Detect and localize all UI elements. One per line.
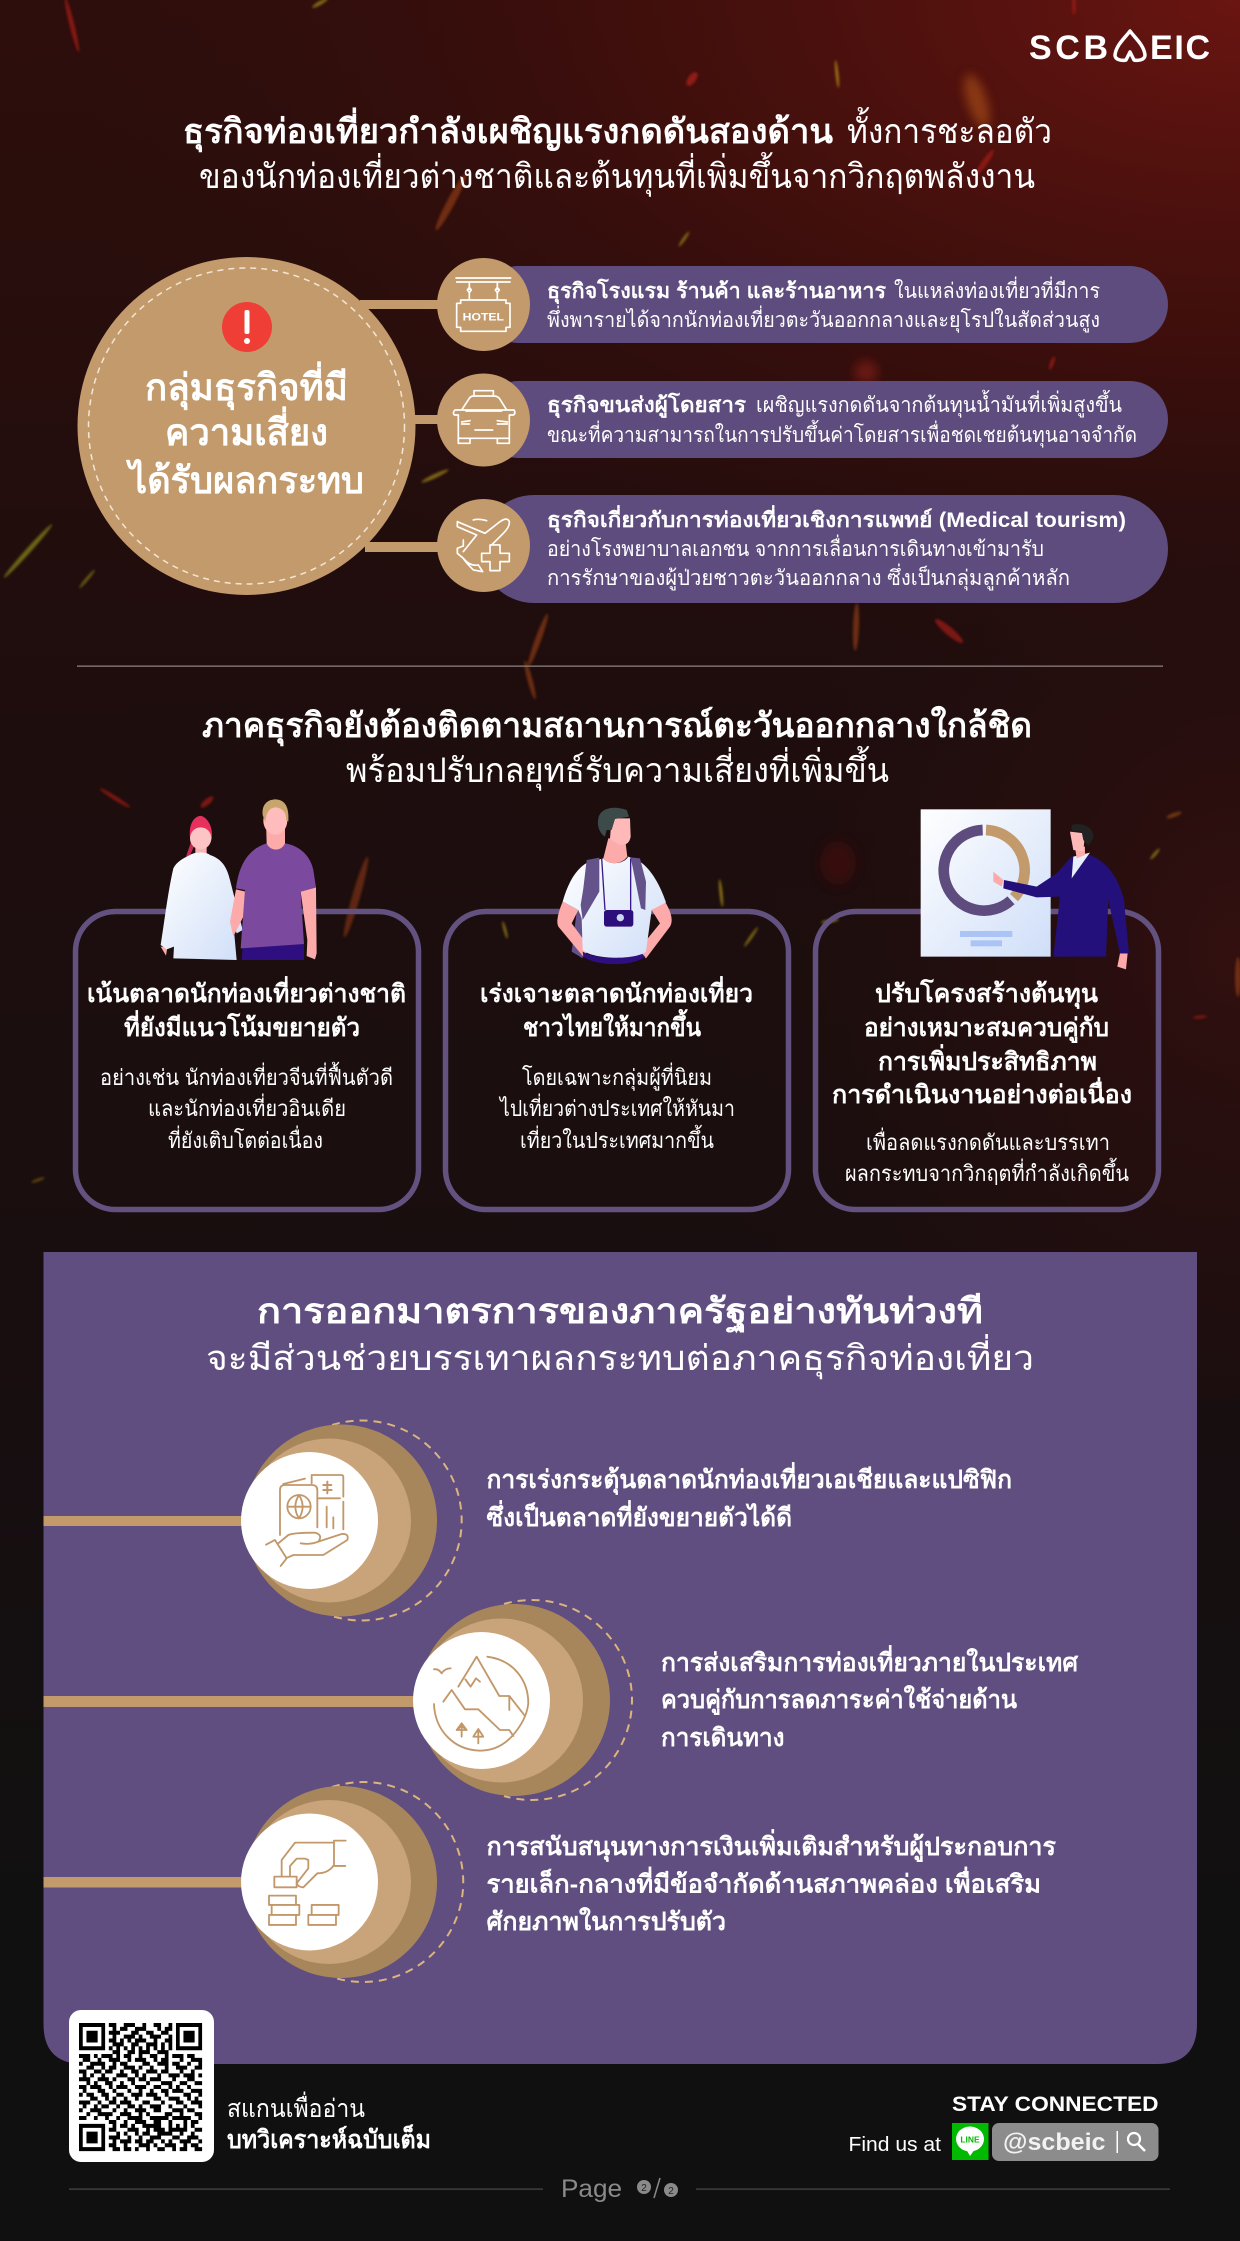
measure 1: Asia-Pacific: การเร่งกระตุ้นตลาดนักท่องเที่ยวเอเชียและแปซิฟิก [486,1462,1012,1496]
panel: passenger transport pill: เผชิญแรงกดดันจากต้นทุนน้ำมันที่เพิ่มสูงขึ้น [756,390,1122,418]
heading: monitor the Middle East: พร้อมปรับกลยุทธ์รับความเสี่ยงที่เพิ่มขึ้น [346,746,889,791]
scan-to-read caption: บทวิเคราะห์ฉบับเต็ม [227,2124,431,2154]
measure 1: Asia-Pacific: ซึ่งเป็นตลาดที่ยังขยายตัวได้ดี [486,1500,792,1532]
panel: medical tourism pill [480,495,1168,603]
panel: passenger transport pill: ขณะที่ความสามารถในการปรับขึ้นค่าโดยสารเพื่อชดเชยต้นทุนอาจจำกัด [547,420,1137,448]
panel: foreign tourists card: อย่างเช่น นักท่องเที่ยวจีนที่ฟื้นตัวดี [100,1062,393,1090]
panel: medical tourism pill: การรักษาของผู้ป่วยชาวตะวันออกกลาง ซึ่งเป็นกลุ่มลูกค้าหลัก [547,563,1070,591]
panel: cost structure card [816,912,1158,1210]
panel: Thai tourists card: เร่งเจาะตลาดนักท่องเที่ยว [480,976,753,1008]
panel: cost structure card: เพื่อลดแรงกดดันและบรรเทา [866,1127,1110,1155]
heading: tourism business pressures: ธุรกิจท่องเที่ยวกำลังเผชิญแรงกดดันสองด้าน [183,107,833,153]
icon: hotel sign [437,258,530,351]
circle title: ความเสี่ยง [165,406,328,453]
panel: medical tourism pill: ธุรกิจเกี่ยวกับการท่องเที่ยวเชิงการแพทย์ (Medical tourism) [547,504,1126,534]
panel: hotel pill: ธุรกิจโรงแรม ร้านค้า และร้านอาหาร [547,278,887,305]
panel: Thai tourists card [446,912,788,1210]
page number: Page [561,2175,622,2203]
heading: tourism business pressures: ทั้งการชะลอตัว [847,107,1052,151]
panel: cost structure card: ปรับโครงสร้างต้นทุน [875,978,1098,1010]
icon: mountains [434,1657,528,1751]
measure 2: domestic tourism: การเดินทาง [661,1724,784,1752]
panel: Thai tourists card: ชาวไทยให้มากขึ้น [523,1008,701,1042]
scan-to-read caption: สแกนเพื่ออ่าน [227,2091,365,2123]
heading: tourism business pressures [183,107,1052,197]
measure 3: SME financial support: ศักยภาพในการปรับตัว [486,1906,726,1936]
icon: taxi [437,374,530,466]
page number: 2 [641,2183,647,2194]
panel heading: การออกมาตรการของภาครัฐอย่างทันท่วงที [257,1292,983,1334]
panel: medical tourism pill: อย่างโรงพยาบาลเอกชน จากการเลื่อนการเดินทางเข้ามารับ [547,534,1044,561]
section divider [77,666,1163,667]
logo: SCB EIC [1029,29,1210,67]
line handle search box [992,2123,1158,2161]
panel: foreign tourists card: เน้นตลาดนักท่องเที่ยวต่างชาติ [87,976,406,1008]
icon: red warning [222,302,272,352]
panel: at-risk business groups circle [78,257,416,595]
panel heading: จะมีส่วนช่วยบรรเทาผลกระทบต่อภาคธุรกิจท่องเที่ยว [206,1334,1034,1379]
panel: Thai tourists card: ไปเที่ยวต่างประเทศให้หันมา [498,1093,735,1121]
background sparks [2,0,1240,1184]
illustration: backpacker with camera [557,808,672,964]
panel: foreign tourists card: ที่ยังมีแนวโน้มขยายตัว [124,1010,360,1042]
panel: foreign tourists card [76,912,418,1210]
stay connected: STAY CONNECTED [952,2093,1158,2116]
icon: LINE: LINE [960,2134,980,2144]
circle title: ได้รับผลกระทบ [125,458,364,501]
panel: hotel pill: พึ่งพารายได้จากนักท่องเที่ยวตะวันออกกลางและยุโรปในสัดส่วนสูง [547,305,1100,333]
panel: foreign tourists card: ที่ยังเติบโตต่อเนื่อง [168,1125,323,1153]
stay connected: Find us at [848,2134,941,2156]
icon: passport and ticket on hand [266,1475,348,1566]
panel: foreign tourists card: และนักท่องเที่ยวอินเดีย [148,1093,346,1121]
page number: 2 [668,2186,674,2197]
illustration: presenter with donut chart [921,809,1129,969]
panel: cost structure card: อย่างเหมาะสมควบคู่กับ [864,1014,1109,1044]
heading: monitor the Middle East [202,705,1032,791]
heading: tourism business pressures: ของนักท่องเที่ยวต่างชาติและต้นทุนที่เพิ่มขึ้นจากวิกฤตพลังงาน [199,152,1035,197]
panel heading [206,1292,1034,1379]
measure 2: domestic tourism: การส่งเสริมการท่องเที่ยวภายในประเทศ [661,1645,1079,1677]
line handle search box: @scbeic [1003,2129,1106,2156]
panel: government measures [44,1252,1197,2064]
measure 1: Asia-Pacific [44,1420,1012,1620]
icon: hand with coins [269,1841,346,1925]
heading: monitor the Middle East: ภาคธุรกิจยังต้องติดตามสถานการณ์ตะวันออกกลางใกล้ชิด [202,705,1032,747]
panel: cost structure card: ผลกระทบจากวิกฤตที่กำลังเกิดขึ้น [845,1158,1129,1186]
panel: Thai tourists card: เที่ยวในประเทศมากขึ้น [520,1125,714,1153]
scan-to-read caption [227,2091,431,2154]
stay connected [848,2093,1158,2161]
panel: cost structure card: การดำเนินงานอย่างต่อเนื่อง [832,1077,1132,1109]
icon: LINE [952,2123,988,2160]
panel: passenger transport pill [480,381,1168,458]
icon: plane and medical cross [437,499,530,592]
panel: cost structure card: การเพิ่มประสิทธิภาพ [878,1044,1097,1076]
measure 2: domestic tourism: ควบคู่กับการลดภาระค่าใช้จ่ายด้าน [661,1684,1017,1716]
measure 3: SME financial support [44,1782,1057,1982]
logo: SCB EIC: SCB [1029,29,1108,67]
panel: hotel pill: ในแหล่งท่องเที่ยวที่มีการ [894,276,1100,303]
panel: hotel pill [480,266,1168,343]
circle title [125,361,364,501]
QR code [69,2010,214,2162]
measure 2: domestic tourism [44,1600,1079,1800]
logo: SCB EIC: EIC [1150,29,1210,67]
measure 3: SME financial support: การสนับสนุนทางการเงินเพิ่มเติมสำหรับผู้ประกอบการ [486,1829,1057,1863]
icon: hotel sign: HOTEL [463,312,504,324]
circle title: กลุ่มธุรกิจที่มี [145,361,348,411]
page number [69,2175,1170,2203]
panel: passenger transport pill: ธุรกิจขนส่งผู้โดยสาร [547,392,747,419]
panel: Thai tourists card: โดยเฉพาะกลุ่มผู้ที่นิยม [522,1062,712,1091]
measure 3: SME financial support: รายเล็ก-กลางที่มีข้อจำกัดด้านสภาพคล่อง เพื่อเสริม [486,1866,1041,1898]
connector bars [360,300,445,552]
illustration: tourist couple [161,799,317,960]
